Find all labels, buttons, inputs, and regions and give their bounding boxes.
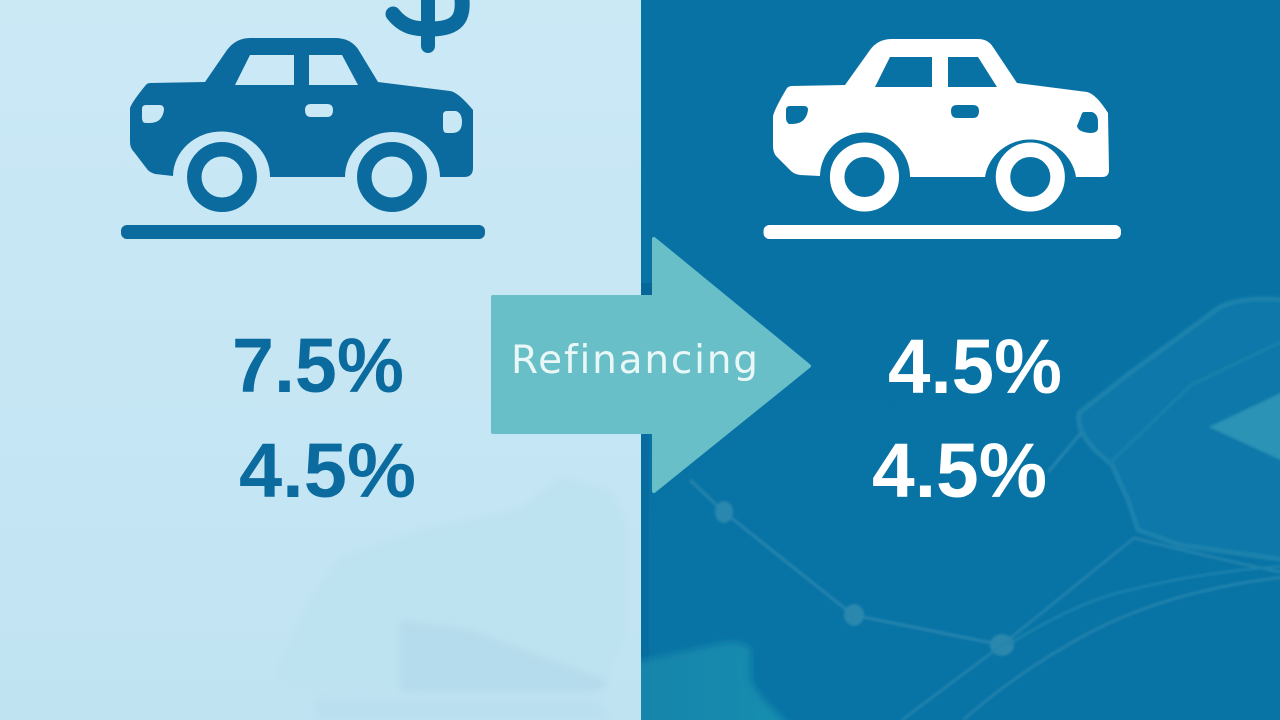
rate: before bottom: 4.5% [239, 428, 416, 514]
panel: before refinancing [0, 0, 641, 720]
rate: after top: 4.5% [888, 324, 1062, 410]
background papers [400, 620, 604, 690]
icon: dollar sign [393, 0, 462, 46]
rate: after bottom: 4.5% [872, 428, 1047, 514]
rate: before top: 7.5% [232, 323, 404, 409]
panel: after refinancing [630, 0, 1280, 720]
dark road line [121, 225, 485, 239]
arrow: refinancing [493, 239, 809, 491]
arrow label: Refinancing [511, 338, 758, 383]
background hand and chart [630, 299, 1280, 720]
white road line [764, 225, 1121, 239]
darker edge strips [641, 283, 653, 295]
icon: white car [773, 39, 1109, 204]
icon: dark car [130, 38, 473, 205]
